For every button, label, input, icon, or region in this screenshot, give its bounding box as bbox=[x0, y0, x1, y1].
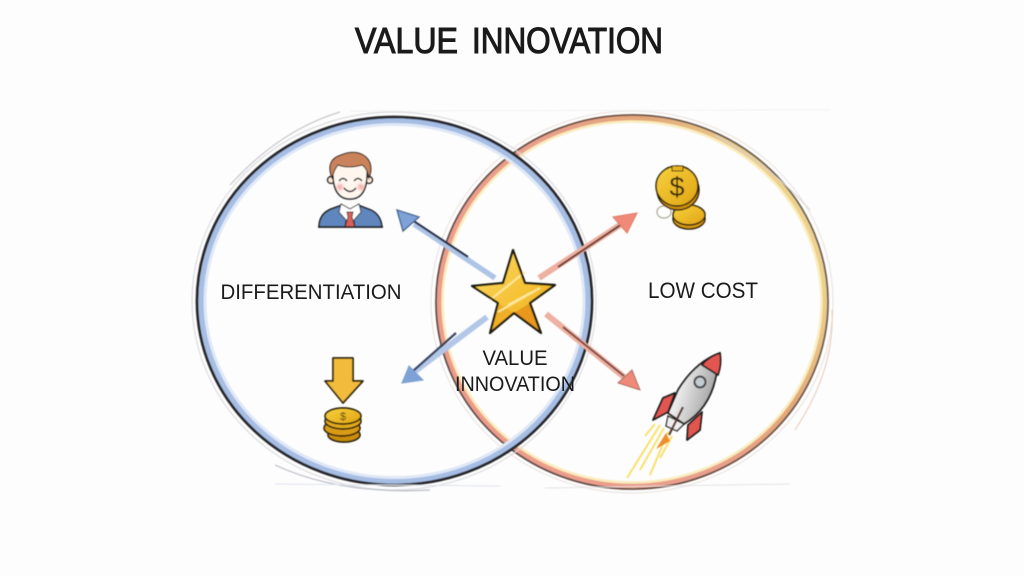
suit bbox=[319, 205, 382, 227]
icon: rocket bbox=[627, 353, 721, 478]
nose bbox=[702, 353, 721, 375]
label: value innovation: VALUE bbox=[482, 347, 548, 370]
title: VALUE bbox=[355, 20, 458, 61]
porthole bbox=[694, 376, 706, 388]
ears bbox=[328, 177, 334, 183]
fins bbox=[653, 393, 675, 420]
icon: star bbox=[472, 250, 555, 333]
sketch strokes bbox=[715, 135, 810, 210]
label: differentiation: DIFFERENTIATION bbox=[220, 280, 402, 304]
icon: dollar coins: $ bbox=[669, 172, 685, 202]
arrow: to coins bbox=[539, 213, 637, 278]
label: low cost: LOW COST bbox=[648, 278, 758, 303]
cheeks bbox=[335, 182, 345, 192]
panel: low cost circle bbox=[431, 111, 833, 493]
icon: down arrow with coin stack: $ bbox=[340, 411, 346, 423]
label: value innovation: INNOVATION bbox=[455, 373, 575, 396]
eyes and smile bbox=[339, 178, 362, 192]
arrow: to person bbox=[397, 210, 495, 278]
panel: differentiation circle bbox=[192, 110, 830, 491]
hull bbox=[668, 353, 720, 424]
title bbox=[355, 20, 663, 61]
base line bbox=[318, 226, 383, 228]
center strut bbox=[669, 407, 683, 435]
arrow: to rocket bbox=[546, 314, 640, 390]
title: INNOVATION bbox=[472, 20, 663, 61]
face bbox=[333, 160, 367, 199]
icon: down arrow with coin stack bbox=[324, 358, 363, 442]
sketch strokes bbox=[230, 112, 340, 185]
label: value innovation bbox=[455, 347, 575, 396]
hair bbox=[330, 152, 371, 178]
flame bbox=[627, 424, 672, 478]
shirt and tie bbox=[339, 204, 361, 227]
arrow: to falling cost bbox=[402, 317, 487, 383]
nozzle bbox=[666, 416, 684, 431]
icon: smiling businessman bbox=[318, 152, 383, 227]
icon: dollar coins bbox=[656, 166, 705, 229]
